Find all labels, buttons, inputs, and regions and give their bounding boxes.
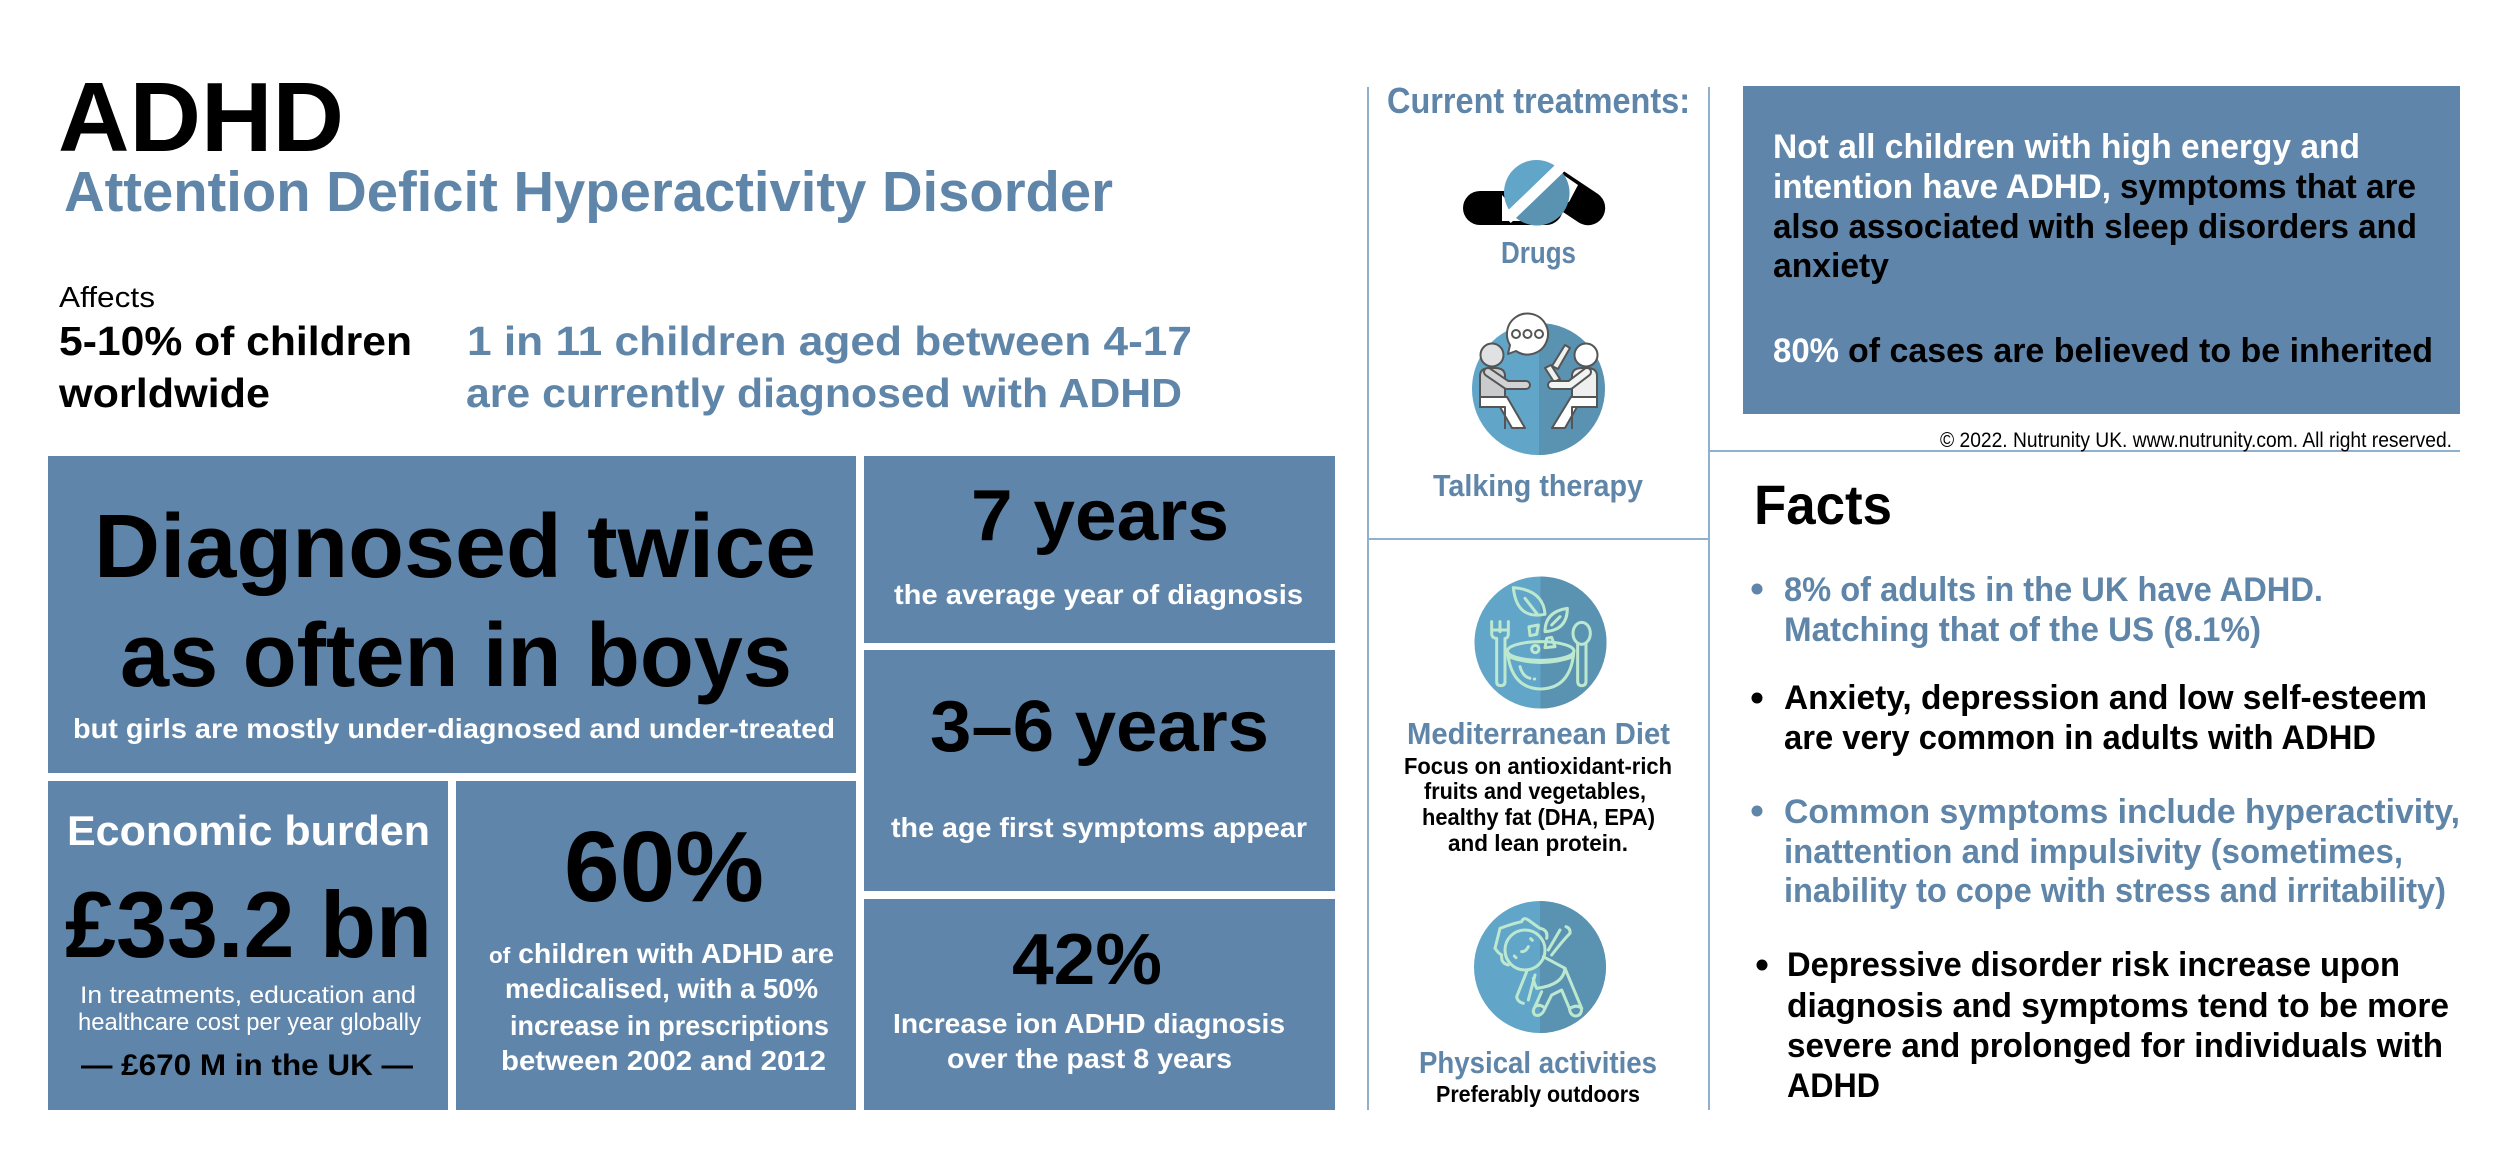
panel: 60% medicalised: of children with ADHD are xyxy=(489,938,834,969)
fact: depressive disorder risk: diagnosis and symptoms tend to be more xyxy=(1787,987,2449,1025)
fact: anxiety and depression: are very common in adults with ADHD xyxy=(1784,719,2376,757)
panel: not all children: anxiety xyxy=(1773,247,1889,285)
text block: mediterranean diet: Focus on antioxidant-rich xyxy=(1404,753,1672,779)
fact: depressive disorder risk xyxy=(1756,946,2449,1105)
text block: affects xyxy=(58,282,412,416)
heading: current treatments: Current treatments: xyxy=(1387,80,1690,121)
panel: 7 years: the average year of diagnosis xyxy=(894,579,1303,610)
panel: 60% medicalised: between 2002 and 2012 xyxy=(501,1045,826,1076)
panel: 60% medicalised xyxy=(456,781,856,1110)
panel: not all children: of cases are believed to be inherited xyxy=(1848,332,2433,370)
icon: talking therapy xyxy=(1472,314,1605,455)
panel: diagnosed twice: but girls are mostly under-diagnosed and under-treated xyxy=(73,713,835,744)
fact: anxiety and depression xyxy=(1752,679,2427,757)
text block: affects: Affects xyxy=(59,282,155,314)
text block: diagnosed rate: are currently diagnosed with ADHD xyxy=(466,370,1182,416)
text block: diagnosed rate: 1 in 11 children aged between 4-17 xyxy=(467,318,1192,364)
title xyxy=(58,62,1113,224)
fact: adults prevalence xyxy=(1752,571,2323,649)
panel: 60% medicalised: medicalised, with a 50% xyxy=(505,973,818,1004)
fact: depressive disorder risk: ADHD xyxy=(1787,1067,1880,1105)
text block: affects: worldwide xyxy=(58,370,270,416)
panel: 3–6 years: the age first symptoms appear xyxy=(891,812,1307,843)
text block: physical activities: Physical activities xyxy=(1419,1045,1657,1080)
title: Attention Deficit Hyperactivity Disorder xyxy=(64,160,1113,224)
text block: mediterranean diet xyxy=(1404,716,1672,856)
panel: economic burden: In treatments, education and xyxy=(80,982,416,1009)
title: ADHD xyxy=(58,62,344,172)
text block: mediterranean diet: and lean protein. xyxy=(1448,830,1628,856)
panel: 60% medicalised: increase in prescriptions xyxy=(510,1010,829,1041)
text block: mediterranean diet: healthy fat (DHA, EPA) xyxy=(1422,804,1655,830)
panel: 42%: Increase ion ADHD diagnosis xyxy=(893,1008,1285,1039)
panel: not all children: also associated with sleep disorders and xyxy=(1773,208,2417,246)
text block: physical activities: Preferably outdoors xyxy=(1436,1081,1640,1107)
panel: diagnosed twice: Diagnosed twice xyxy=(94,497,816,597)
panel: 7 years: 7 years xyxy=(971,476,1229,556)
panel: 3–6 years: 3–6 years xyxy=(930,687,1269,767)
panel: not all children: symptoms that are xyxy=(2120,168,2416,206)
panel: economic burden: healthcare cost per year globally xyxy=(78,1009,421,1036)
panel: economic burden: Economic burden xyxy=(67,807,430,854)
panel: economic burden: £33.2 bn xyxy=(65,872,432,977)
copyright note: © 2022. Nutrunity UK. www.nutrunity.com. All right reserved. xyxy=(1940,429,2452,452)
icon: pills xyxy=(1463,160,1605,226)
fact: common symptoms: inability to cope with stress and irritability) xyxy=(1784,872,2446,910)
panel: 42% xyxy=(864,899,1335,1110)
fact: common symptoms xyxy=(1752,793,2460,910)
fact: depressive disorder risk: Depressive disorder risk increase upon xyxy=(1787,946,2400,984)
text block: affects: 5-10% of children xyxy=(59,318,412,364)
text block: physical activities xyxy=(1419,1045,1657,1107)
panel: 42%: over the past 8 years xyxy=(947,1043,1232,1074)
fact: common symptoms: inattention and impulsivity (sometimes, xyxy=(1784,833,2403,871)
text block: mediterranean diet: Mediterranean Diet xyxy=(1407,716,1670,751)
icon: mediterranean diet xyxy=(1474,576,1606,708)
panel: not all children: Not all children with high energy and xyxy=(1773,128,2360,166)
panel: economic burden: — £670 M in the UK — xyxy=(81,1049,413,1082)
panel: 42%: 42% xyxy=(1012,920,1162,1000)
fact: common symptoms: Common symptoms include hyperactivity, xyxy=(1784,793,2460,831)
panel: 60% medicalised: 60% xyxy=(564,811,764,923)
panel: economic burden xyxy=(48,781,448,1110)
panel: 3–6 years xyxy=(864,650,1335,891)
fact: anxiety and depression: Anxiety, depression and low self-esteem xyxy=(1784,679,2427,717)
fact: adults prevalence: Matching that of the US (8.1%) xyxy=(1784,611,2261,649)
label: drugs: Drugs xyxy=(1501,235,1576,270)
panel: not all children: 80% xyxy=(1773,332,1839,370)
icon: physical activities xyxy=(1474,901,1606,1033)
panel: diagnosed twice xyxy=(48,456,856,773)
panel: diagnosed twice: as often in boys xyxy=(120,606,792,706)
fact: adults prevalence: 8% of adults in the UK have ADHD. xyxy=(1784,571,2323,609)
fact: depressive disorder risk: severe and prolonged for individuals with xyxy=(1787,1027,2443,1065)
panel: not all children: intention have ADHD, xyxy=(1773,168,2111,206)
label: talking therapy: Talking therapy xyxy=(1433,468,1644,503)
text block: mediterranean diet: fruits and vegetables, xyxy=(1424,778,1646,804)
panel: 7 years xyxy=(864,456,1335,643)
heading: facts: Facts xyxy=(1754,473,1892,536)
text block: diagnosed rate xyxy=(466,318,1192,416)
panel: not all children xyxy=(1743,86,2460,414)
